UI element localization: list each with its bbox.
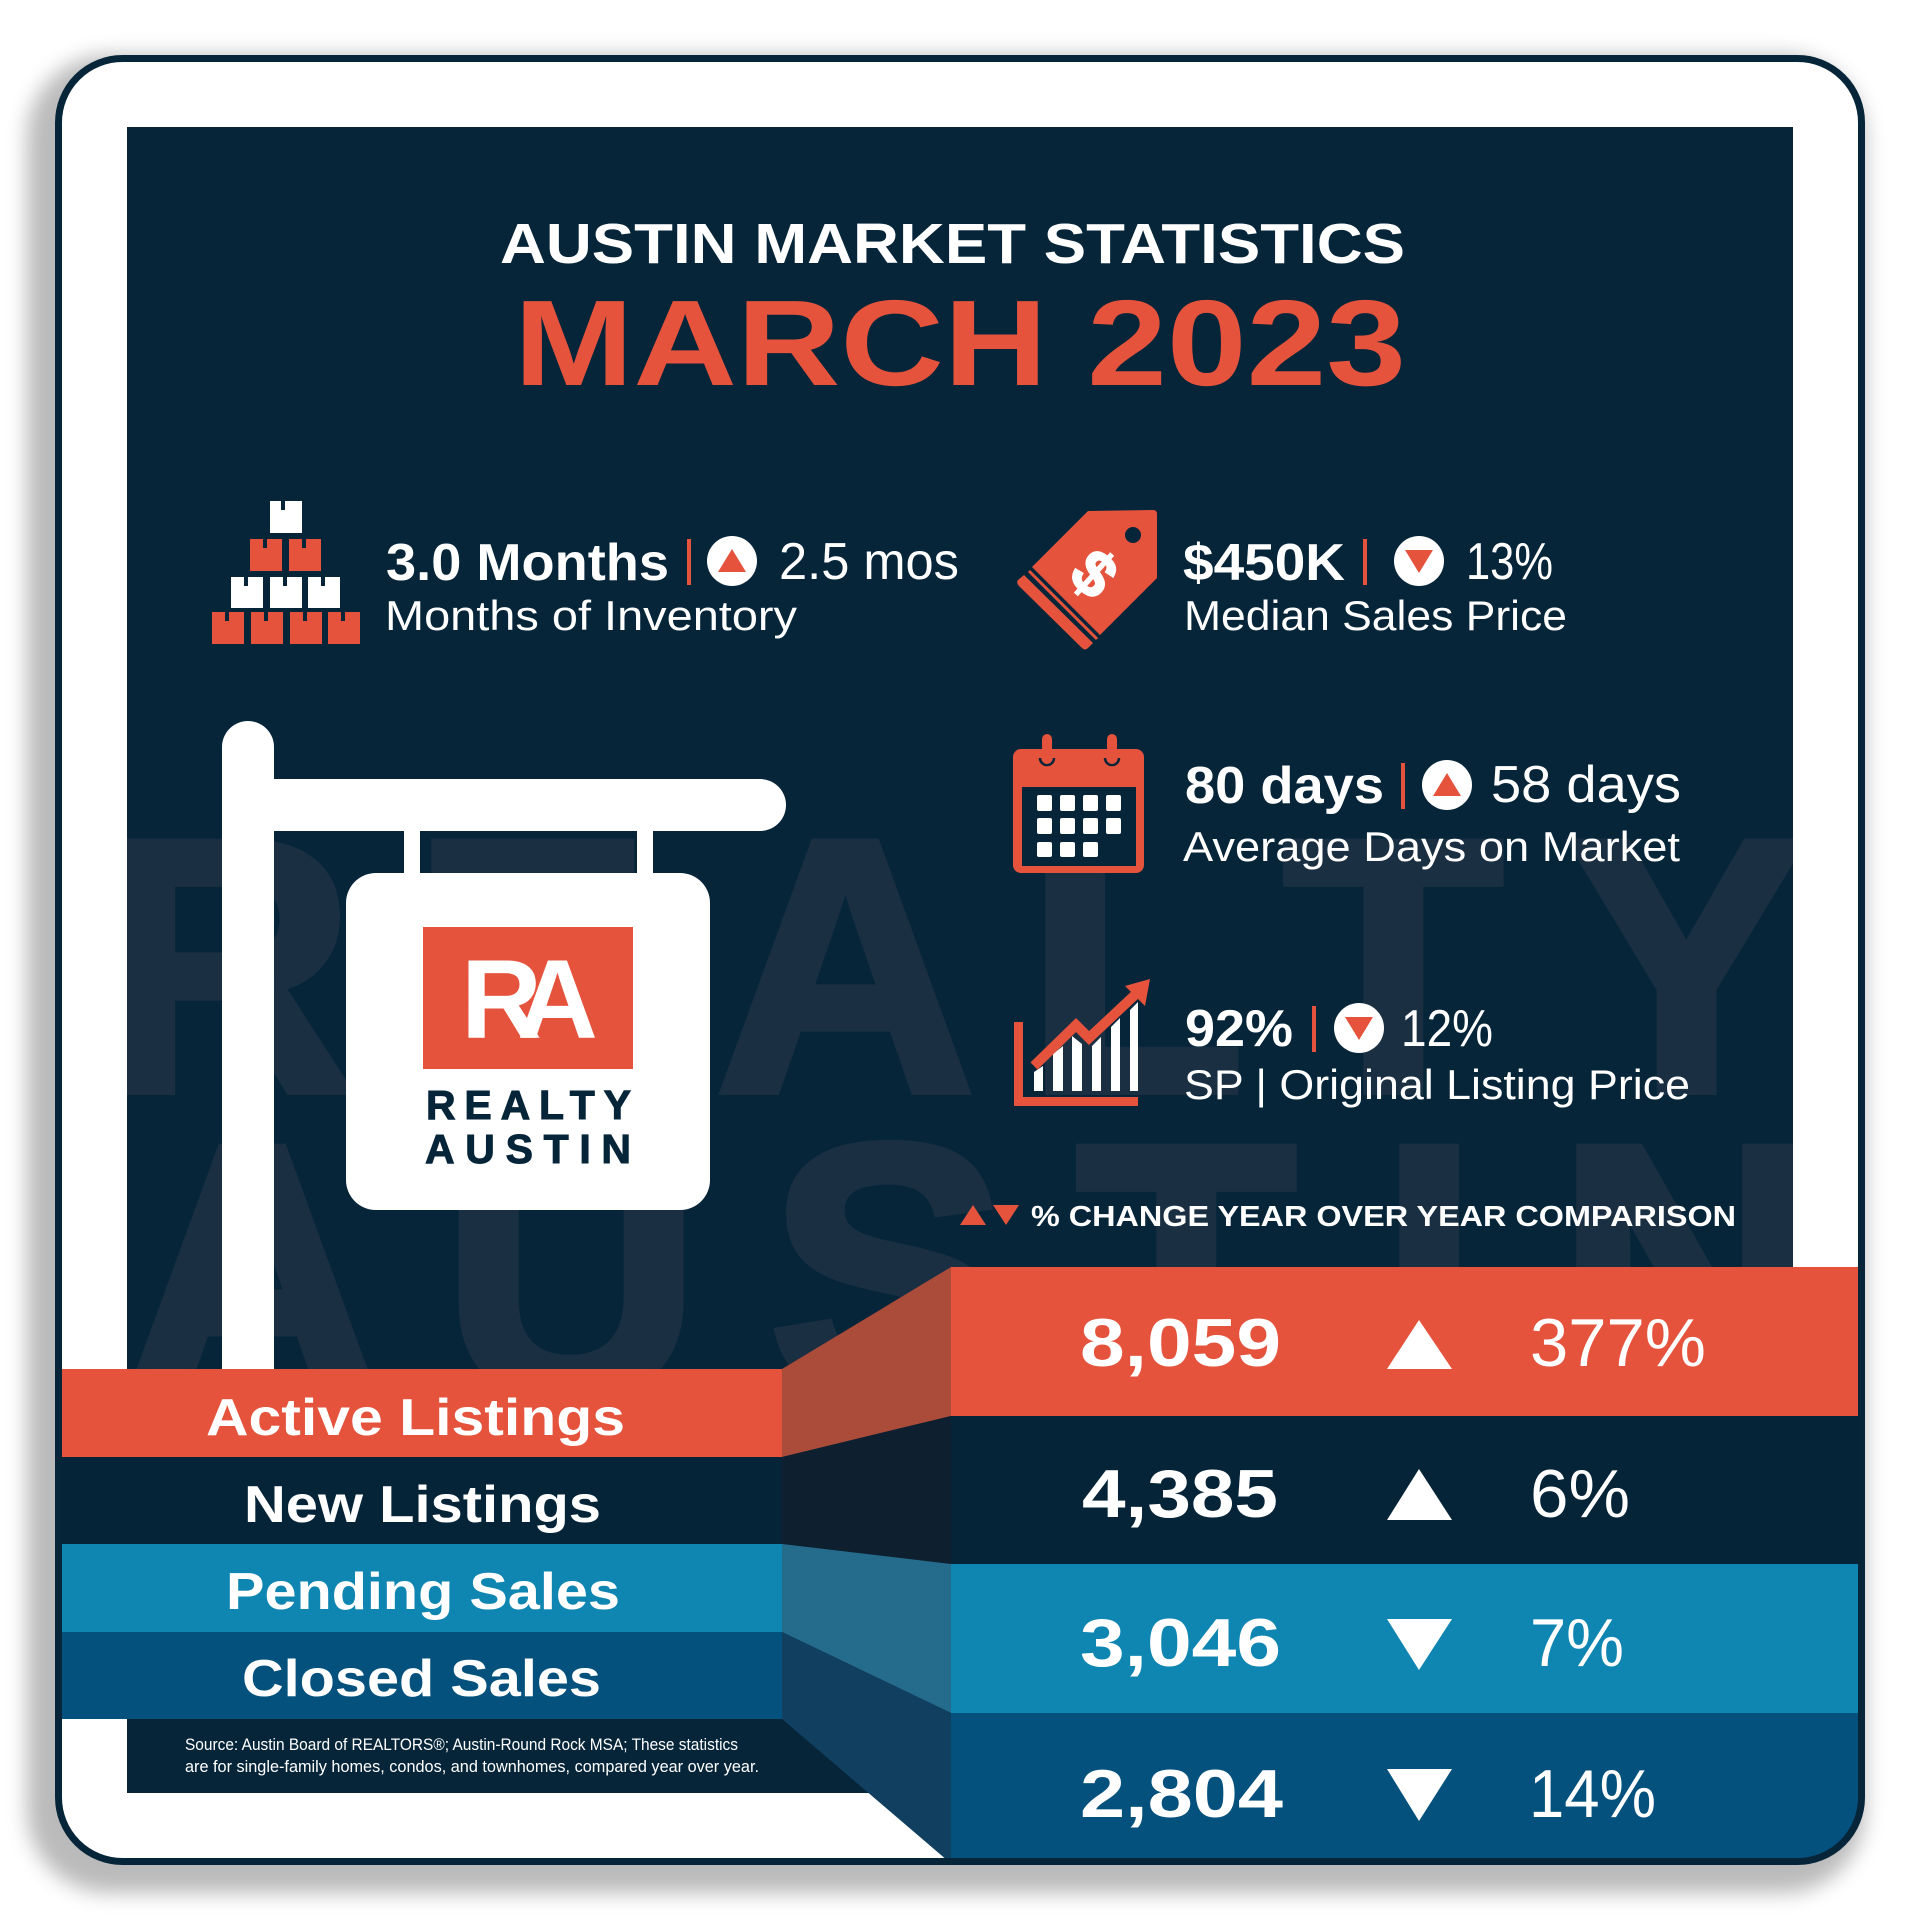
watermark text: REALTY — [95, 764, 1807, 1168]
stat: median sales price: $450K — [1183, 534, 1345, 592]
stat: median sales price — [1183, 533, 1567, 639]
dark panel — [127, 127, 1793, 1793]
band: active listings: Active Listings — [206, 1389, 625, 1447]
band: active listings: 377% — [1530, 1305, 1706, 1381]
stat: months of inventory: 2.5 mos — [779, 533, 959, 591]
stat: median sales price: 13% — [1466, 533, 1553, 591]
stat: original listing price: 92% — [1185, 1000, 1293, 1058]
band: pending sales: Pending Sales — [226, 1563, 620, 1621]
yard sign: RA — [461, 937, 598, 1062]
band: active listings — [59, 1267, 1861, 1457]
stat: median sales price: Median Sales Price — [1184, 592, 1567, 639]
icon: price tag: $ — [1057, 535, 1132, 612]
watermark text: AUSTIN — [122, 1069, 1817, 1473]
band: new listings: 4,385 — [1082, 1456, 1278, 1532]
yard sign — [222, 721, 786, 1369]
band: new listings: New Listings — [244, 1476, 601, 1534]
stat bands and funnel — [59, 1267, 1861, 1861]
yard sign: AUSTIN — [425, 1126, 631, 1172]
band: pending sales: 3,046 — [1080, 1605, 1281, 1681]
band: new listings: 6% — [1530, 1456, 1630, 1532]
footnote — [185, 1735, 759, 1776]
stat: months of inventory: Months of Inventory — [385, 592, 797, 639]
yard sign: REALTY — [426, 1082, 631, 1128]
stat: average days on market: 58 days — [1491, 756, 1681, 814]
stat: average days on market — [1183, 756, 1681, 870]
title: AUSTIN MARKET STATISTICS — [500, 212, 1405, 276]
band: pending sales — [59, 1544, 1861, 1713]
band: closed sales: Closed Sales — [242, 1650, 601, 1708]
icon: stacked boxes — [212, 501, 360, 644]
band: closed sales: 2,804 — [1080, 1756, 1283, 1832]
band: active listings: 8,059 — [1080, 1305, 1281, 1381]
band: new listings — [59, 1416, 1861, 1564]
icon: calendar — [1013, 734, 1144, 873]
stat: average days on market: 80 days — [1185, 757, 1384, 815]
band: closed sales — [59, 1632, 1861, 1861]
icon: price tag — [1017, 510, 1157, 650]
watermark text — [127, 838, 1793, 1369]
stat: original listing price: SP | Original Listing Price — [1184, 1061, 1690, 1108]
icon: growth chart — [1014, 979, 1150, 1106]
stat: original listing price — [1184, 1000, 1690, 1108]
stat: months of inventory: 3.0 Months — [386, 534, 669, 592]
stat: average days on market: Average Days on Market — [1183, 823, 1680, 870]
footnote: are for single-family homes, condos, and townhomes, compared year over year. — [185, 1757, 759, 1776]
stat: original listing price: 12% — [1401, 1000, 1493, 1058]
band: closed sales: 14% — [1529, 1756, 1656, 1832]
stat: months of inventory — [385, 533, 959, 639]
legend: % CHANGE YEAR OVER YEAR COMPARISON — [1031, 1201, 1736, 1233]
title — [500, 212, 1406, 411]
band: pending sales: 7% — [1530, 1605, 1624, 1681]
footnote: Source: Austin Board of REALTORS®; Austin-Round Rock MSA; These statistics — [185, 1735, 738, 1754]
title: MARCH 2023 — [514, 275, 1406, 411]
